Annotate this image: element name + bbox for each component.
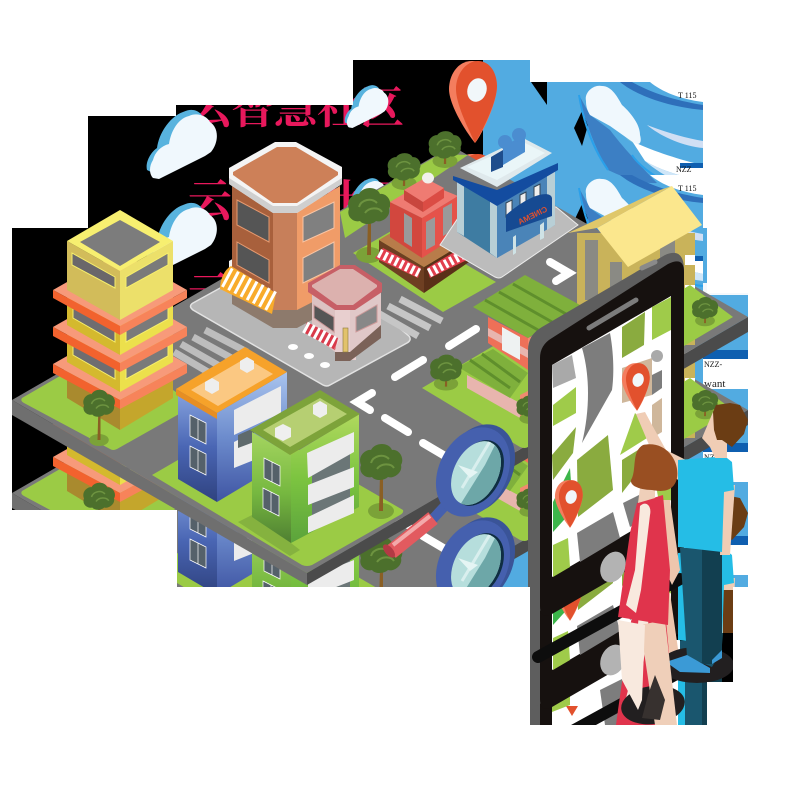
pink kiosk bbox=[308, 265, 382, 361]
people repeated lower layer bbox=[616, 496, 748, 725]
icon: large map pin bbox=[449, 61, 497, 143]
tree bbox=[430, 355, 462, 390]
right-hand wave bands bbox=[703, 283, 748, 575]
phone top sensor bbox=[642, 262, 655, 268]
right-hand wave bands: NZZ- bbox=[704, 453, 723, 462]
phone home button bbox=[595, 547, 631, 587]
woman left arm bbox=[626, 504, 650, 613]
title text third row: 云智慧社区 bbox=[188, 270, 403, 319]
phone screen slice at the bottom bbox=[530, 640, 680, 725]
cinema building bbox=[453, 138, 558, 258]
man right arm bbox=[720, 485, 735, 555]
city platform bbox=[12, 146, 748, 585]
shop awnings bbox=[375, 248, 466, 278]
tree bbox=[360, 444, 402, 519]
title text: 云智慧社区 bbox=[188, 84, 403, 133]
yellow tower pad bbox=[21, 347, 195, 450]
orange awning bbox=[220, 266, 276, 314]
green roof house lower bbox=[458, 349, 540, 420]
icon: cloud left bbox=[147, 110, 217, 179]
tree near red building bbox=[348, 188, 390, 263]
illustration canvas bbox=[12, 60, 748, 725]
tree bbox=[516, 395, 542, 424]
woman hair bbox=[631, 444, 677, 491]
front pad bbox=[152, 420, 403, 566]
icon: cloud small bbox=[345, 85, 388, 128]
woman front leg bbox=[618, 620, 645, 710]
icon: camera on cinema roof bbox=[491, 128, 526, 172]
map screen bbox=[552, 296, 671, 577]
icon: map pin on phone bbox=[622, 363, 650, 411]
road markings bbox=[357, 262, 569, 456]
blue sky and wave backdrop bbox=[12, 60, 748, 750]
woman heels bbox=[642, 675, 665, 720]
concrete plaza bbox=[190, 287, 411, 387]
tree bbox=[388, 153, 421, 190]
foot shadows bbox=[619, 647, 734, 728]
black backdrop silhouette bbox=[12, 60, 748, 725]
shop base bbox=[379, 213, 469, 293]
woman right arm bbox=[660, 500, 680, 585]
phone lower band bbox=[538, 579, 680, 657]
orange building bbox=[229, 142, 342, 328]
magnifying glass bbox=[381, 412, 530, 560]
green building bbox=[250, 390, 360, 543]
man pointing at phone bbox=[636, 403, 748, 673]
man head bbox=[702, 412, 727, 458]
yellow building bbox=[568, 186, 702, 345]
red building pad bbox=[353, 226, 496, 312]
right lot pad bbox=[422, 342, 610, 448]
woman neck bbox=[638, 488, 655, 503]
lower woman bbox=[616, 593, 678, 725]
woman in red dress bbox=[618, 444, 680, 725]
man legs bbox=[680, 548, 722, 667]
crosswalk right bbox=[378, 299, 442, 336]
man shirt bbox=[678, 457, 734, 552]
tree bbox=[83, 390, 115, 446]
cinema pad bbox=[440, 200, 578, 278]
main isometric city scene bbox=[12, 61, 748, 657]
right pad with tree bbox=[684, 285, 733, 439]
man shoes bbox=[666, 650, 722, 673]
right-hand wave bands: want bbox=[704, 378, 725, 390]
woman back leg bbox=[640, 620, 677, 725]
woman dress bbox=[618, 495, 670, 625]
kiosk awning bbox=[303, 322, 338, 350]
icon: map pin on phone lower bbox=[555, 480, 583, 528]
cafe tables bbox=[288, 344, 330, 368]
tree bbox=[692, 297, 718, 326]
green strip with trees bbox=[340, 154, 468, 238]
red building tower bbox=[390, 172, 458, 258]
lower man bbox=[678, 496, 748, 725]
man pointing arm bbox=[636, 412, 690, 484]
right-hand wave bands: NZZ- bbox=[704, 360, 723, 369]
tree bbox=[429, 131, 462, 168]
green roof house upper bbox=[473, 275, 585, 370]
right-hand wave bands: want bbox=[704, 471, 725, 483]
blue building bbox=[176, 347, 287, 502]
phone speaker bbox=[589, 300, 636, 328]
phone bbox=[528, 253, 684, 657]
yellow tower bbox=[53, 210, 187, 430]
crosswalk left bbox=[174, 330, 247, 372]
cinema sign: CINEMA bbox=[516, 205, 549, 227]
